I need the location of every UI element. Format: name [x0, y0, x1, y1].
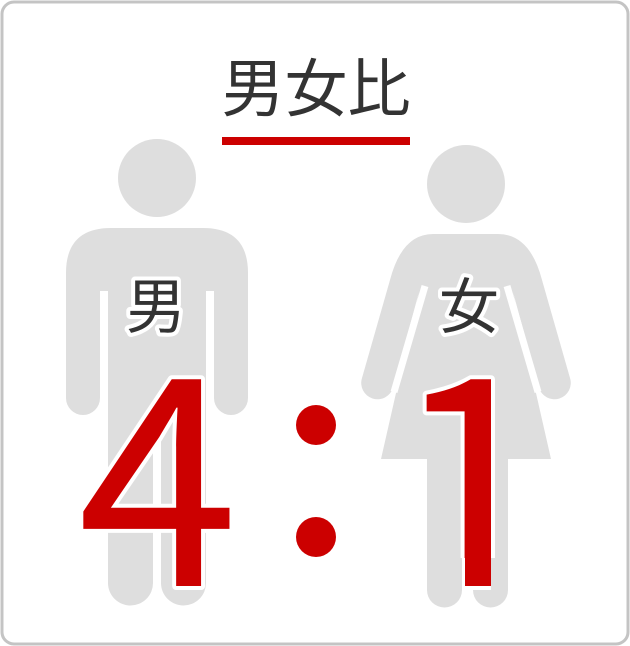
icon: man	[66, 139, 248, 606]
colon	[296, 405, 336, 557]
label: woman: 女	[439, 274, 499, 341]
icon: woman	[361, 145, 571, 608]
title: 男女比	[222, 55, 410, 125]
label: man: 男	[126, 274, 186, 341]
